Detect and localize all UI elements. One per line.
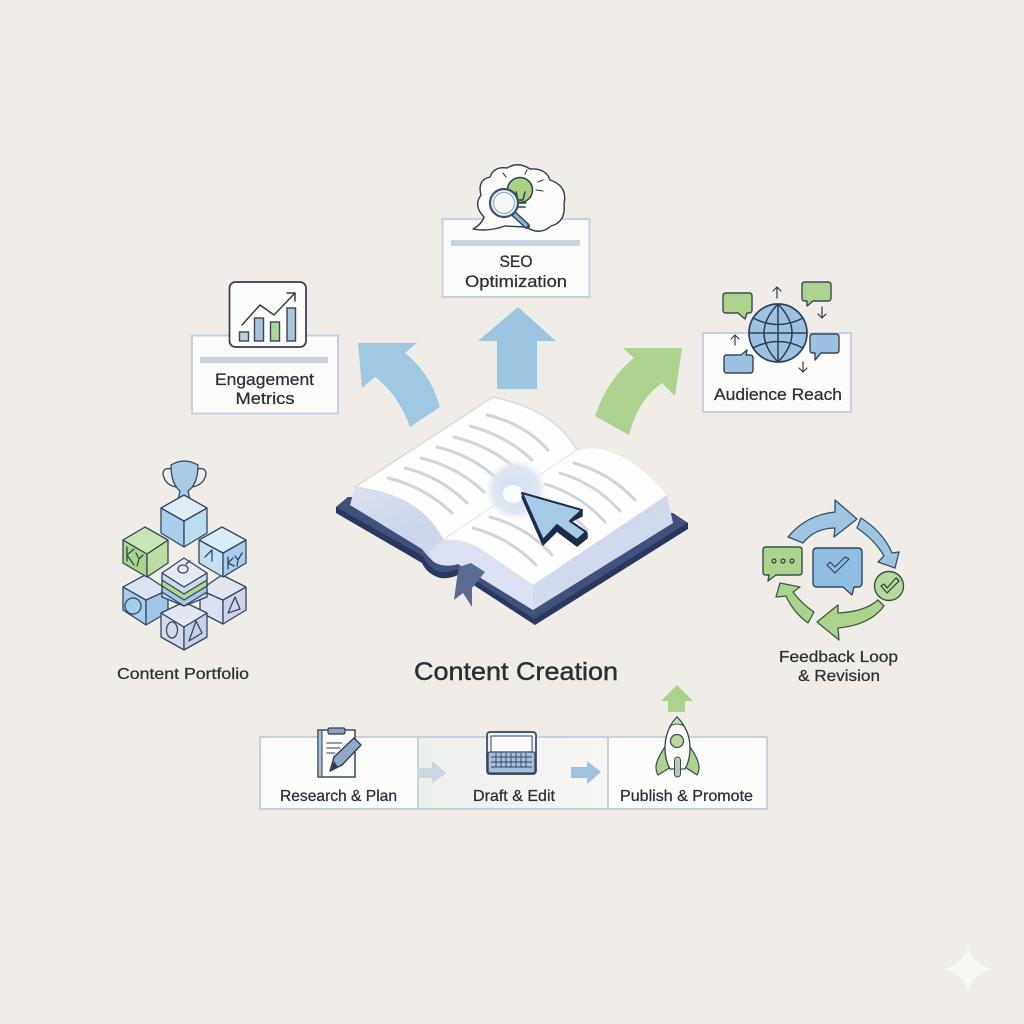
ribbon bookmark	[454, 563, 485, 607]
step: publish and promote	[608, 685, 767, 809]
icon: content portfolio cubes	[123, 461, 246, 650]
title: Content Creation: Content Creation	[414, 658, 618, 686]
icon: rocket	[656, 717, 699, 777]
label: SEO Optimization: SEO	[500, 252, 532, 271]
arrow: blue step	[571, 761, 601, 784]
arrow: loop left	[776, 583, 814, 623]
label: Audience Reach: Audience Reach	[714, 385, 842, 404]
label: Publish & Promote: Publish & Promote	[620, 788, 753, 805]
book cover	[336, 497, 688, 625]
icon: open book with cursor	[336, 397, 688, 625]
cube: green KY	[123, 527, 168, 577]
step: draft and edit	[417, 732, 608, 809]
arrow: green up	[661, 685, 693, 712]
icon: cursor	[522, 493, 587, 546]
panel: audience reach	[703, 282, 851, 412]
arrow: gray step	[417, 761, 446, 784]
left page	[355, 397, 577, 540]
trophy	[163, 461, 206, 513]
label: Engagement Metrics: Metrics	[236, 389, 294, 408]
arrow: loop top	[788, 500, 857, 543]
label: Engagement Metrics: Engagement	[215, 370, 314, 389]
arrow: right curved green	[595, 348, 682, 435]
label: Content Portfolio: Content Portfolio	[117, 666, 249, 683]
label: SEO Optimization	[465, 252, 567, 291]
arrow: left curved blue	[358, 343, 440, 427]
text lines	[388, 415, 635, 565]
panel: engagement metrics	[192, 282, 338, 414]
cube: blue KY	[199, 527, 246, 577]
cube: bottom lavender	[161, 602, 207, 650]
glow	[485, 459, 547, 521]
stacked layers	[162, 558, 207, 606]
step: research and plan	[260, 728, 418, 809]
right page	[443, 448, 667, 585]
label: Engagement Metrics	[215, 370, 314, 408]
cube: lower right	[200, 575, 246, 624]
label: Feedback Loop & Revision: Feedback Loop	[779, 649, 898, 666]
cube: top	[161, 495, 207, 547]
arrow: loop bottom	[817, 600, 884, 640]
label: Feedback Loop & Revision	[779, 649, 898, 685]
arrow: loop right	[857, 518, 899, 568]
icon: feedback loop	[763, 500, 904, 640]
icon: keyboard device	[487, 732, 536, 774]
icon: globe with speech bubbles	[723, 282, 839, 373]
icon: green chat bubble	[763, 547, 802, 581]
arrow: centre up blue	[478, 307, 556, 389]
icon: sparkle watermark	[944, 945, 992, 992]
icon: thought cloud with magnifier and bulb	[473, 165, 565, 231]
label: Research & Plan: Research & Plan	[280, 788, 397, 805]
panel: workflow steps	[260, 685, 767, 809]
icon: growth chart	[230, 282, 306, 347]
label: Feedback Loop & Revision: & Revision	[798, 668, 880, 685]
page block	[350, 450, 673, 610]
label: Draft & Edit: Draft & Edit	[473, 788, 556, 805]
icon: green check circle	[874, 572, 904, 600]
icon: clipboard and pencil	[318, 728, 361, 777]
icon: blue check bubble	[813, 548, 862, 595]
cube: lower left	[123, 575, 168, 625]
label: SEO Optimization: Optimization	[465, 272, 567, 291]
panel: SEO optimization	[442, 165, 590, 297]
